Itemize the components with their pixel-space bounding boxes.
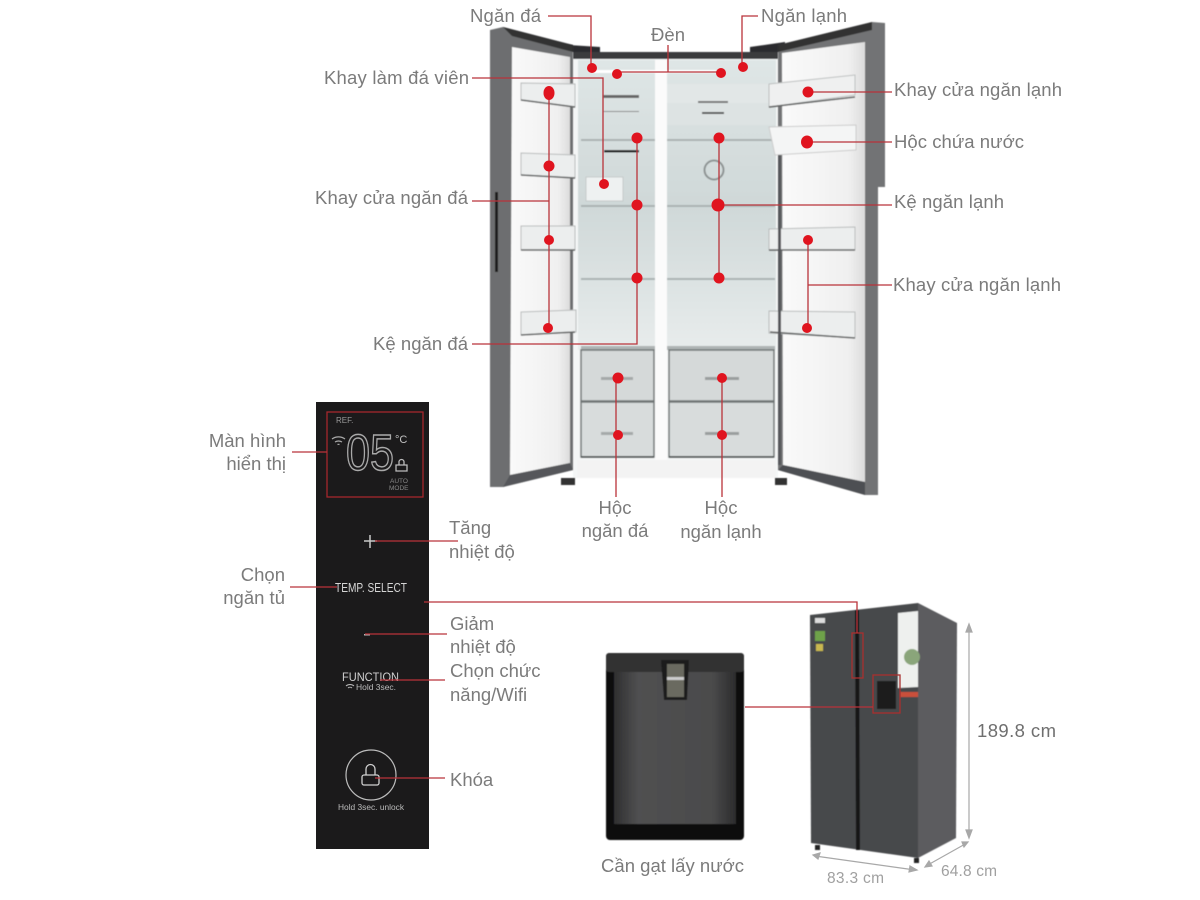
label: Hộc ngăn lạnh: Hộc	[705, 497, 737, 518]
label: Ngăn lạnh: Ngăn lạnh	[761, 5, 847, 26]
width arrow	[813, 853, 917, 872]
label: Tăng nhiệt độ: Tăng	[449, 517, 491, 538]
label: width: 83.3 cm	[827, 870, 884, 887]
label: Khay cửa ngăn lạnh lower: Khay cửa ngăn lạnh	[893, 274, 1061, 295]
label: Chọn chức năng/Wifi: Chọn chức	[450, 660, 541, 681]
minus button	[364, 634, 370, 636]
label: Chọn chức năng/Wifi: năng/Wifi	[450, 684, 527, 705]
label: Chọn ngăn tủ: Chọn	[241, 564, 285, 585]
function button: FUNCTION	[342, 670, 399, 684]
label: Khay cửa ngăn lạnh upper: Khay cửa ngăn lạnh	[894, 79, 1062, 100]
label: Giảm nhiệt độ: Giảm	[450, 613, 494, 634]
label: Tăng nhiệt độ: nhiệt độ	[449, 541, 515, 562]
plus button	[364, 535, 377, 548]
label: Hộc ngăn đá: ngăn đá	[582, 520, 649, 541]
fridge body	[810, 603, 957, 863]
label: Ngăn đá: Ngăn đá	[470, 5, 542, 26]
hold 3 sec: Hold 3sec.	[356, 682, 396, 692]
auto mode label: AUTO	[390, 478, 408, 485]
temperature digits: 05	[346, 424, 394, 481]
dispenser highlight box	[873, 675, 900, 713]
label: Kệ ngăn đá: Kệ ngăn đá	[373, 333, 469, 354]
closed refrigerator	[810, 603, 972, 872]
label: Khay cửa ngăn đá: Khay cửa ngăn đá	[315, 187, 469, 208]
callout lines	[472, 16, 892, 497]
control panel and dispenser callout lines	[290, 452, 873, 778]
small wifi icon	[346, 684, 354, 688]
label: Đèn: Đèn	[651, 24, 685, 45]
right door	[561, 22, 885, 495]
label: Hộc ngăn lạnh: ngăn lạnh	[680, 521, 762, 542]
label: Cần gạt lấy nước: Cần gạt lấy nước	[601, 855, 744, 876]
label: Khay làm đá viên: Khay làm đá viên	[324, 67, 469, 88]
label: height: 189.8 cm	[977, 720, 1056, 741]
wifi icon	[332, 437, 345, 444]
fridge cabinet	[553, 42, 785, 478]
lock button	[346, 750, 396, 800]
depth arrow	[925, 842, 968, 867]
panel background	[316, 402, 429, 849]
control panel	[316, 402, 429, 849]
label: Hộc ngăn đá: Hộc	[599, 497, 631, 518]
label: Màn hình hiển thị: hiển thị	[226, 453, 286, 474]
auto mode label: MODE	[389, 485, 409, 492]
display highlight box	[327, 412, 423, 497]
label: depth: 64.8 cm	[941, 863, 997, 880]
label: Kệ ngăn lạnh: Kệ ngăn lạnh	[894, 191, 1004, 212]
label: Màn hình hiển thị: Màn hình	[209, 430, 286, 451]
label: Giảm nhiệt độ: nhiệt độ	[450, 636, 516, 657]
display lock icon	[396, 460, 407, 471]
unlock caption: Hold 3sec. unlock	[338, 802, 405, 812]
callout dots	[543, 62, 814, 440]
label: Khóa: Khóa	[450, 769, 494, 790]
label: Hộc chứa nước: Hộc chứa nước	[894, 131, 1024, 152]
control highlight box	[852, 633, 863, 678]
water dispenser	[606, 653, 744, 840]
left door	[490, 27, 576, 487]
REF label: REF.	[336, 416, 353, 425]
height arrow	[966, 624, 972, 838]
label: Chọn ngăn tủ: ngăn tủ	[223, 587, 285, 608]
open refrigerator	[472, 16, 892, 497]
temp select: TEMP. SELECT	[335, 581, 407, 595]
celsius mark: °C	[395, 434, 407, 446]
